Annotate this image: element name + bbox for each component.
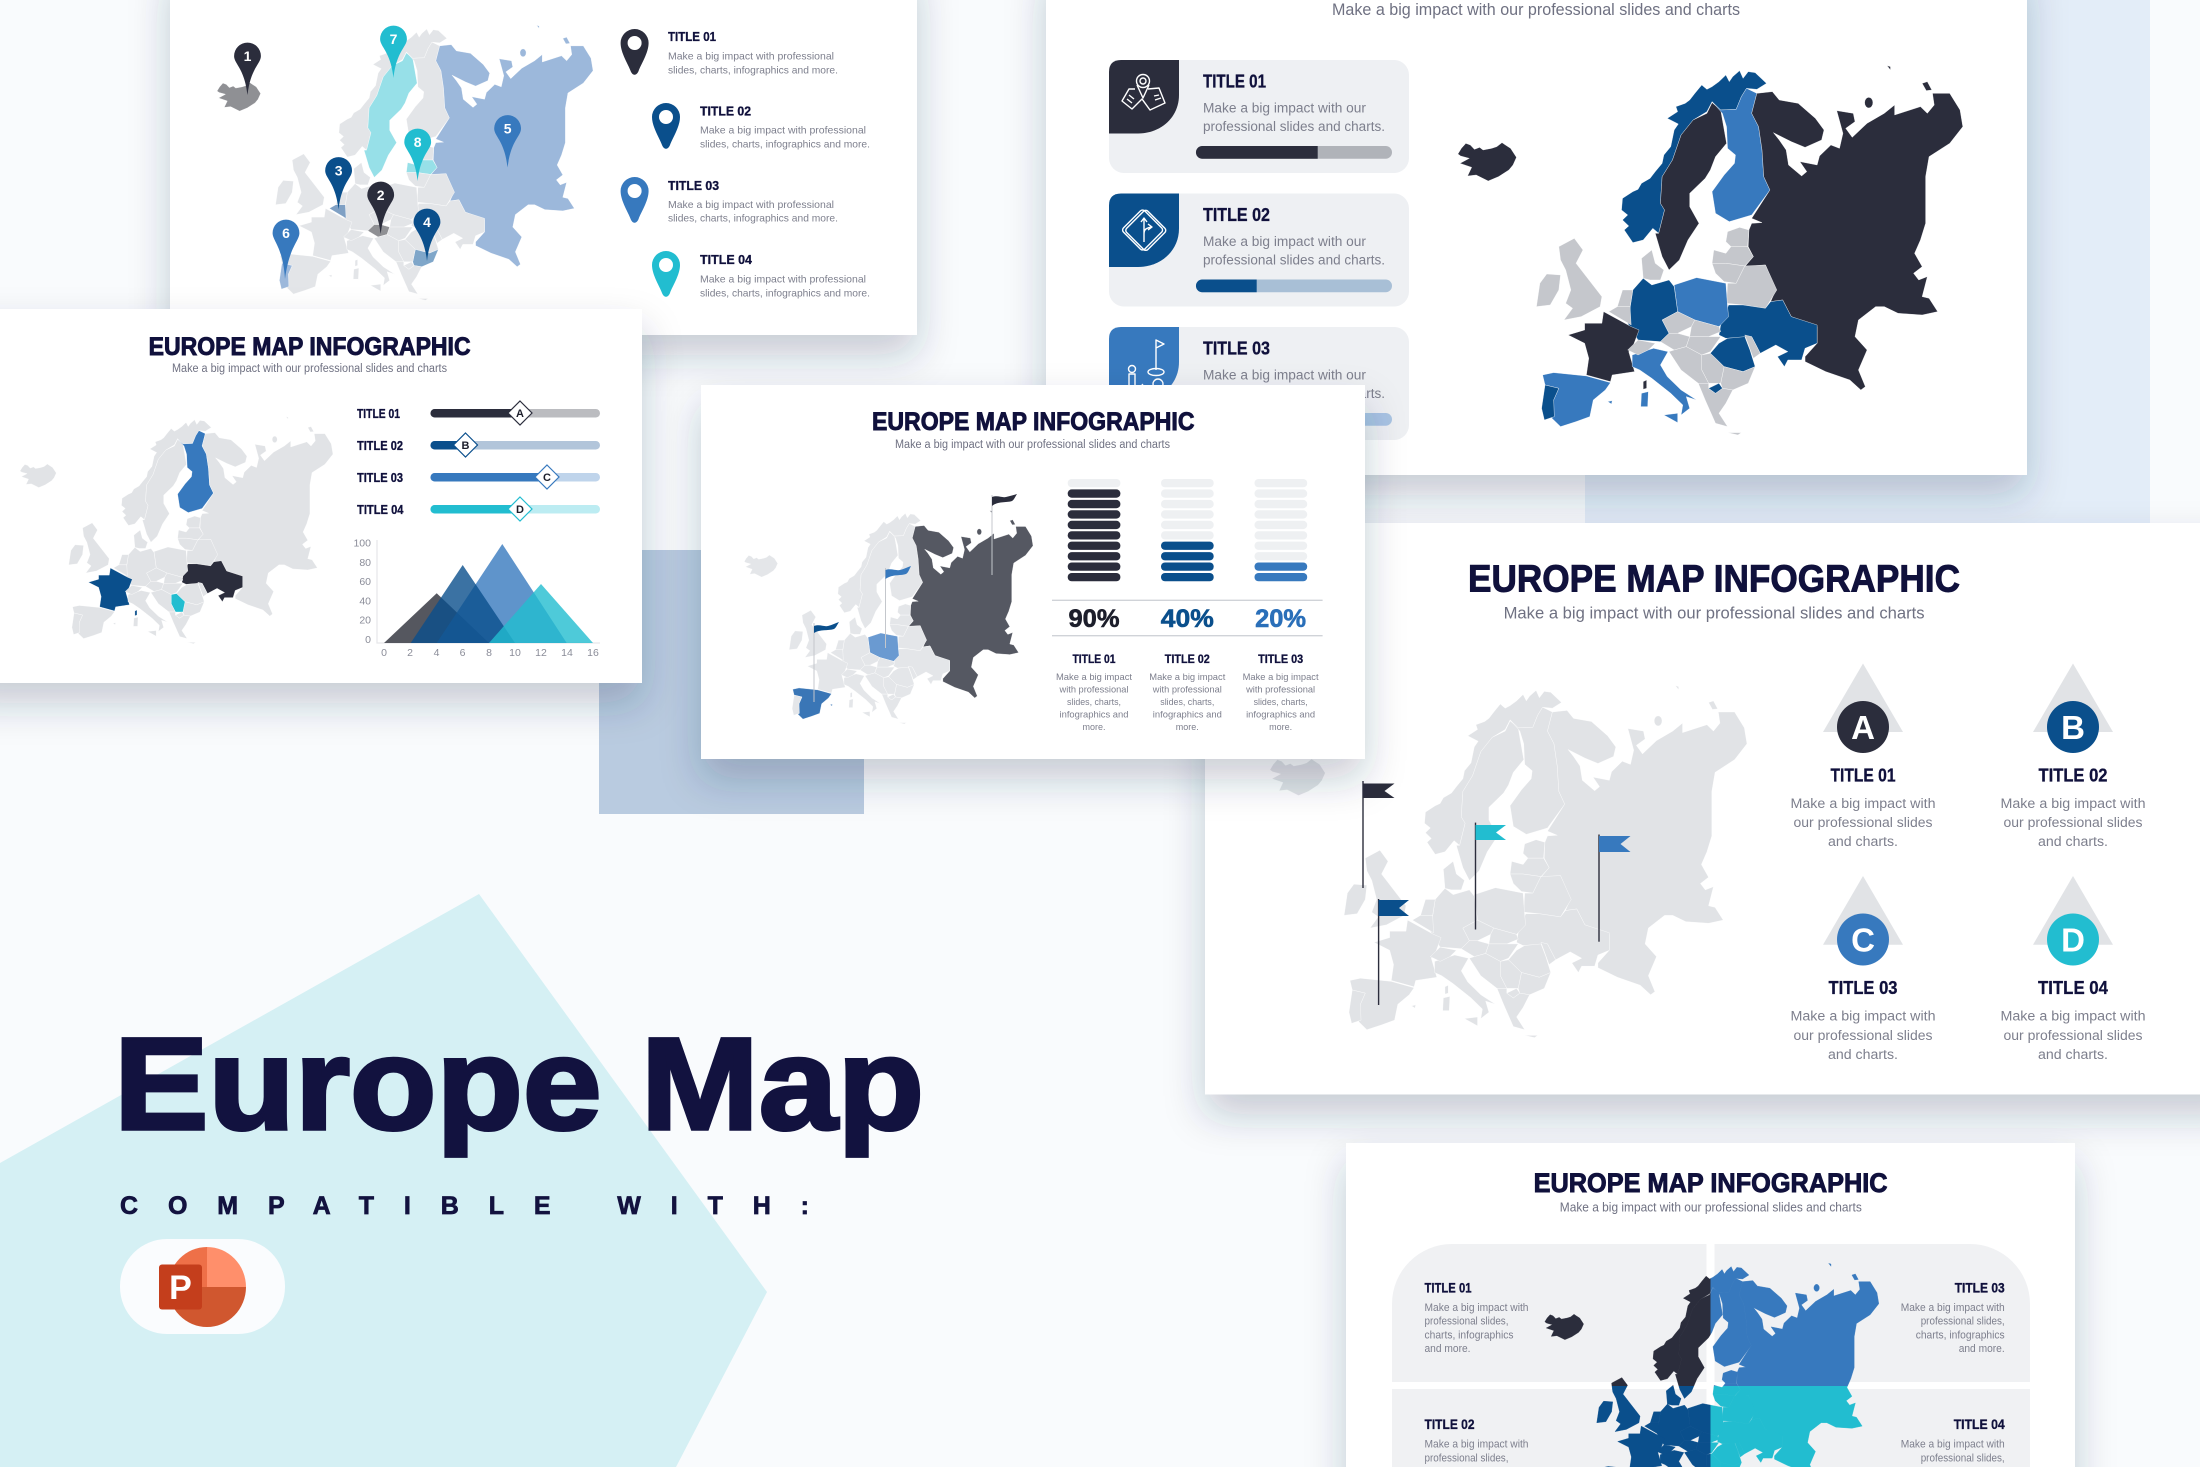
icon: PowerPoint badge — [120, 1239, 285, 1334]
icon: map with pin — [1122, 74, 1165, 110]
slider A: A — [516, 408, 524, 420]
badge A: our professional slides — [1794, 815, 1933, 830]
badge A: Make a big impact with — [1790, 796, 1936, 811]
chart: mountain area chart: 60 — [359, 576, 371, 588]
stacked bars column 2 — [1161, 479, 1214, 581]
text block 01: professional slides, — [1424, 1316, 1508, 1328]
legend row 3: slides, charts, infographics and more. — [668, 212, 838, 224]
flag teal — [1476, 823, 1506, 930]
card 3: professional slides and charts. — [1203, 386, 1385, 401]
badge C: C — [1851, 922, 1875, 958]
flag dark — [1363, 781, 1394, 888]
column text 3: infographics and — [1246, 710, 1315, 720]
legend row 1 — [621, 29, 838, 76]
text block 03: and more. — [1959, 1343, 2005, 1355]
map: four highlighted countries — [20, 417, 333, 644]
badge D: TITLE 04 — [2038, 977, 2109, 998]
legend row 4: slides, charts, infographics and more. — [700, 288, 870, 300]
slider B: TITLE 02 — [357, 439, 403, 453]
badge B: and charts. — [2038, 834, 2108, 849]
pin 5 — [494, 115, 521, 168]
column text 1: with professional — [1059, 684, 1128, 696]
icon: PowerPoint badge: P — [169, 1269, 192, 1307]
text block 02: TITLE 02 — [1424, 1417, 1474, 1432]
text block 01: and more. — [1424, 1343, 1470, 1355]
text block 03: charts, infographics — [1916, 1329, 2005, 1341]
subtitle: Make a big impact with our professional slides and charts — [1504, 604, 1925, 622]
slider B: B — [462, 440, 470, 452]
map: teal quadrant — [1710, 1386, 1862, 1467]
column text 2: Make a big impact — [1149, 672, 1226, 683]
pale teal backdrop polygon — [0, 894, 767, 1467]
badge B: Make a big impact with — [2000, 796, 2146, 811]
pin 8: 8 — [414, 134, 422, 150]
chart: mountain area chart: 12 — [535, 647, 547, 659]
slider A — [357, 401, 600, 425]
steel blue backdrop block — [599, 550, 864, 814]
legend row 2: TITLE 02 — [700, 104, 751, 118]
legend row 1: Make a big impact with professional — [668, 50, 834, 62]
card 3: TITLE 03 — [1203, 339, 1270, 359]
badge C: Make a big impact with — [1790, 1008, 1936, 1024]
map: navy quadrant — [1596, 1386, 1710, 1467]
chart: mountain area chart — [353, 538, 600, 659]
panel: numbered pins map — [170, 0, 917, 335]
badge A: and charts. — [1828, 834, 1898, 849]
flag mid blue wave — [886, 566, 911, 648]
text block 03: professional slides, — [1921, 1316, 2005, 1328]
badge D: our professional slides — [2004, 1028, 2143, 1043]
pin 2 — [367, 182, 394, 234]
text block 04: TITLE 04 — [1954, 1417, 2005, 1432]
text block 01 — [1424, 1280, 1528, 1355]
chart: mountain area chart: 4 — [434, 647, 440, 659]
column text 1: slides, charts, — [1067, 697, 1121, 708]
column text 3: Make a big impact — [1243, 672, 1319, 683]
stacked bars column 1 — [1068, 479, 1120, 581]
badge C: and charts. — [1828, 1047, 1898, 1062]
heading: EUROPE MAP INFOGRAPHIC — [1534, 1168, 1888, 1198]
map: grey base — [1270, 686, 1747, 1038]
pin 3: 3 — [335, 162, 343, 178]
chart: mountain area chart: 40 — [359, 596, 371, 608]
chart: mountain area chart: 0 — [365, 634, 371, 646]
badge D: Make a big impact with — [2000, 1008, 2146, 1024]
column text 2: infographics and — [1153, 710, 1222, 720]
slider D: TITLE 04 — [357, 503, 404, 517]
flag navy wave — [814, 622, 839, 702]
legend row 4: TITLE 04 — [700, 253, 752, 267]
slider C: C — [543, 472, 551, 484]
column text 1 — [1056, 652, 1132, 733]
pin 6 — [273, 220, 299, 279]
column text 2 — [1149, 652, 1226, 733]
card 3 — [1109, 327, 1409, 440]
stacked bars column 3 — [1254, 479, 1307, 581]
text block 02: professional slides, — [1424, 1452, 1508, 1464]
heading: EUROPE MAP INFOGRAPHIC — [872, 408, 1194, 436]
chart: mountain area chart: 10 — [509, 647, 521, 659]
heading: EUROPE MAP INFOGRAPHIC — [1468, 558, 1960, 600]
text block 01: charts, infographics — [1424, 1329, 1514, 1341]
text block 04 — [1901, 1417, 2005, 1464]
text block 02 — [1424, 1417, 1528, 1464]
chart: mountain area chart: 20 — [359, 614, 371, 626]
chart: mountain area chart: 14 — [561, 647, 573, 659]
badge B — [2000, 664, 2146, 849]
badge C: TITLE 03 — [1828, 977, 1898, 998]
column text 1: TITLE 01 — [1072, 652, 1116, 666]
pin 1: 1 — [244, 48, 252, 64]
chart: mountain area chart: 100 — [353, 538, 371, 550]
pin 7 — [380, 26, 407, 78]
percentage 90: 90% — [1068, 605, 1120, 633]
pin 6: 6 — [282, 225, 290, 241]
flag navy — [1379, 899, 1409, 1005]
card 2: Make a big impact with our — [1203, 234, 1367, 249]
chart: mountain area chart: 0 — [381, 647, 387, 659]
column text 2: more. — [1176, 722, 1199, 733]
subtitle: Make a big impact with our professional slides and charts — [1560, 1200, 1862, 1214]
text block 03: Make a big impact with — [1901, 1302, 2005, 1314]
pin 4: 4 — [423, 214, 431, 230]
panel: sliders and mountain chart — [0, 309, 642, 683]
column text 1: more. — [1082, 722, 1106, 733]
chart: mountain area chart: 80 — [359, 557, 371, 569]
column text 3: with professional — [1245, 684, 1315, 696]
legend row 3: TITLE 03 — [668, 179, 719, 193]
badge B: B — [2061, 709, 2085, 746]
badge D: D — [2061, 922, 2085, 958]
subtitle: Make a big impact with our professional slides and charts — [1332, 0, 1740, 19]
map: multicolour countries — [1458, 66, 1963, 435]
slider C: TITLE 03 — [357, 471, 403, 485]
chart: mountain area chart: 6 — [460, 647, 466, 659]
column text 2: with professional — [1152, 684, 1222, 696]
card 1: TITLE 01 — [1203, 72, 1266, 92]
panel: quadrant map — [1346, 1143, 2075, 1467]
card 2: professional slides and charts. — [1203, 252, 1385, 268]
slider A: TITLE 01 — [357, 407, 400, 421]
subtitle: Make a big impact with our professional slides and charts — [895, 439, 1170, 451]
panel: flags and badges — [1205, 523, 2200, 1094]
icon: road sign — [1121, 209, 1167, 252]
percentage 20: 20% — [1255, 605, 1306, 633]
badge C: our professional slides — [1794, 1028, 1933, 1043]
compatible with label: COMPATIBLE WITH: — [120, 1192, 809, 1220]
card 2: TITLE 02 — [1203, 205, 1270, 225]
heading: EUROPE MAP INFOGRAPHIC — [149, 333, 471, 361]
slider B — [357, 433, 600, 457]
slider D: D — [516, 504, 524, 516]
pin 5: 5 — [504, 120, 512, 136]
main title: Europe Map — [114, 1010, 924, 1157]
column text 2: TITLE 02 — [1165, 652, 1210, 666]
column text 3: slides, charts, — [1254, 697, 1308, 708]
legend row 3: Make a big impact with professional — [668, 199, 834, 211]
map: dark quadrant — [1544, 1276, 1710, 1386]
pin 7: 7 — [390, 31, 398, 47]
chart: mountain area chart: 16 — [587, 647, 599, 659]
legend row 2: Make a big impact with professional — [700, 124, 866, 136]
legend row 3 — [621, 177, 838, 224]
pin 3 — [325, 157, 352, 210]
slider D — [357, 497, 600, 521]
legend row 1: TITLE 01 — [668, 30, 716, 44]
column text 1: Make a big impact — [1056, 672, 1132, 683]
card 1: Make a big impact with our — [1203, 101, 1367, 116]
badge C — [1790, 876, 1936, 1062]
badge B: TITLE 02 — [2038, 764, 2108, 786]
panel: stacked bars and percentages — [701, 385, 1365, 759]
text block 04: Make a big impact with — [1901, 1439, 2005, 1451]
legend row 4 — [652, 251, 870, 300]
badge A: A — [1851, 709, 1875, 746]
slider C — [357, 465, 600, 489]
badge B: our professional slides — [2004, 815, 2143, 830]
column text 3 — [1243, 652, 1319, 733]
card 1: professional slides and charts. — [1203, 119, 1385, 134]
percentage 40: 40% — [1161, 605, 1214, 633]
column text 3: more. — [1269, 722, 1292, 733]
pin 8 — [404, 129, 431, 181]
chart: mountain area chart: 8 — [486, 647, 492, 659]
card 3: Make a big impact with our — [1203, 368, 1367, 383]
text block 01: TITLE 01 — [1424, 1280, 1472, 1296]
quadrant backgrounds — [1392, 1244, 2030, 1467]
text block 04: professional slides, — [1921, 1452, 2005, 1464]
column text 1: infographics and — [1060, 710, 1128, 720]
panel: cards and multicolour map — [1046, 0, 2027, 475]
card 2 — [1109, 194, 1409, 306]
column text 3: TITLE 03 — [1258, 652, 1303, 666]
pin 1 — [234, 43, 261, 95]
pin 2: 2 — [377, 187, 385, 203]
badge D: and charts. — [2038, 1047, 2108, 1062]
column text 2: slides, charts, — [1160, 697, 1214, 708]
card 1 — [1109, 60, 1409, 173]
map: Russia, Spain, Poland highlighted — [744, 510, 1033, 724]
map: highlighted pin regions — [217, 25, 593, 300]
badge A — [1790, 664, 1936, 849]
pin 4 — [414, 209, 440, 261]
text block 01: Make a big impact with — [1424, 1302, 1528, 1314]
text block 03 — [1901, 1280, 2005, 1355]
text block 02: Make a big impact with — [1424, 1439, 1528, 1451]
legend row 4: Make a big impact with professional — [700, 274, 866, 286]
icon: flag and person — [1124, 340, 1164, 396]
map: blue quadrant — [1710, 1263, 1879, 1386]
legend row 2 — [652, 103, 870, 150]
light blue backdrop block — [1585, 0, 2150, 523]
chart: mountain area chart: 2 — [407, 647, 413, 659]
flag mid blue — [1599, 834, 1630, 942]
badge A: TITLE 01 — [1830, 764, 1896, 786]
badge D — [2000, 876, 2146, 1062]
text block 03: TITLE 03 — [1955, 1280, 2005, 1296]
subtitle: Make a big impact with our professional slides and charts — [172, 363, 447, 375]
legend row 1: slides, charts, infographics and more. — [668, 64, 838, 76]
flag dark wave — [992, 494, 1017, 575]
legend row 2: slides, charts, infographics and more. — [700, 138, 870, 150]
